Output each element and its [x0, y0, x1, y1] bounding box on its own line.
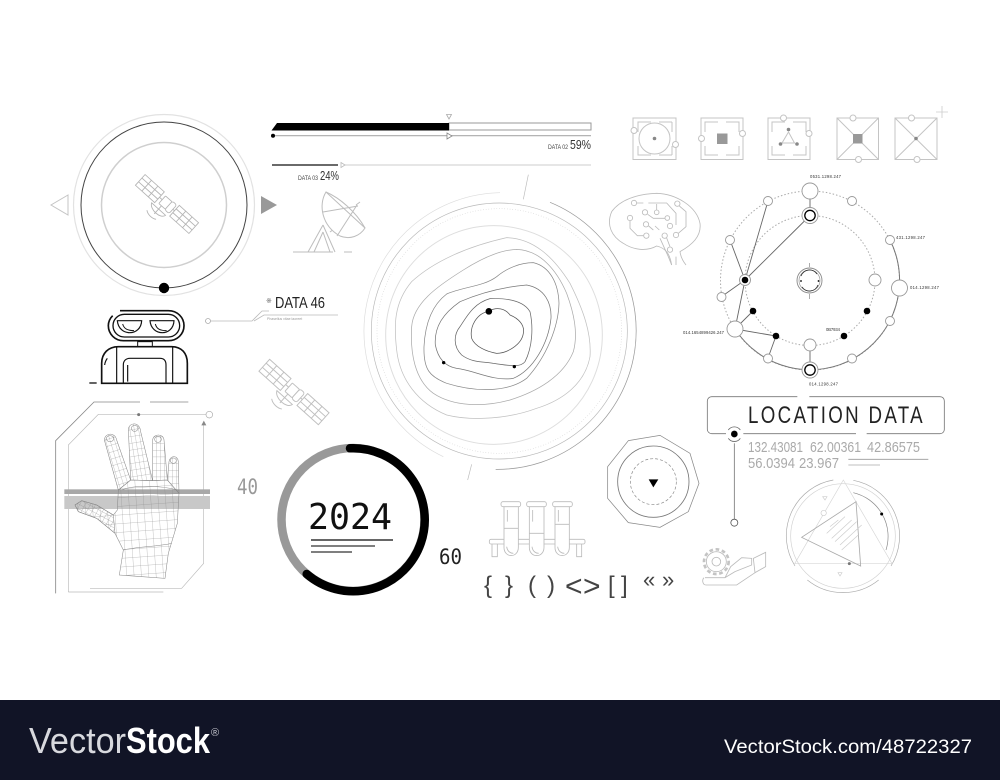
- footer logo: ®: [211, 727, 219, 739]
- coordinates text: 56.0394: [748, 455, 795, 472]
- icon: triangle emblem: [786, 480, 900, 593]
- icon: satellite outline: [249, 359, 329, 435]
- bracket glyphs row: }: [505, 572, 513, 599]
- coordinates text: 23.967: [799, 455, 839, 472]
- coordinates text: [748, 439, 920, 472]
- donut chart: 2024: [282, 448, 425, 591]
- bracket glyphs row: (: [528, 572, 536, 599]
- footer bar: [0, 700, 1000, 780]
- chart: contour map: [364, 175, 636, 480]
- icon square 5: [895, 115, 937, 162]
- label: 40: 40: [237, 475, 258, 499]
- icons: target squares row: [631, 106, 948, 162]
- chart: orbital network: 014.1298.247: [809, 382, 839, 386]
- center hub: [797, 263, 822, 299]
- data 46 label: DATA 46: [275, 295, 325, 312]
- progress bar: data 02: [271, 114, 591, 152]
- progress bar: data 02: DATA 02: [548, 145, 569, 151]
- hand wireframe: [75, 424, 179, 578]
- bracket glyphs row: {: [484, 572, 492, 599]
- coordinates text: 62.00361: [810, 439, 861, 456]
- bracket glyphs row: »: [662, 567, 674, 592]
- progress bar: data 02: 59%: [570, 138, 591, 152]
- chart: orbital network: 0B7934: [826, 327, 841, 332]
- footer url: VectorStock.com/48722327: [724, 737, 972, 758]
- label: 60: 60: [439, 545, 462, 569]
- footer logo: Vector: [29, 720, 126, 761]
- bracket glyphs row: [: [608, 572, 615, 599]
- chart: orbital network: 431.1298.247: [896, 235, 926, 240]
- bracket glyphs row: [484, 567, 674, 603]
- footer logo: [29, 720, 219, 761]
- icon square 1: [631, 118, 678, 160]
- icon: test tubes: [489, 502, 585, 557]
- icon square 3: [768, 115, 812, 160]
- chart: orbital network: 014.1654899426.247: [683, 330, 725, 335]
- chart: orbital network: [683, 174, 940, 386]
- panel: location data: [707, 397, 944, 526]
- icon: robot: [89, 311, 187, 383]
- icon: satellite: [127, 175, 199, 243]
- donut chart: 2024: 2024: [308, 497, 392, 538]
- progress bar: data 03: 24%: [320, 169, 339, 183]
- bracket glyphs row: <: [565, 570, 583, 603]
- icon: octagon target: [608, 435, 699, 527]
- icon square 2: [698, 118, 746, 160]
- progress bar: data 03: DATA 03: [298, 176, 319, 182]
- bracket glyphs row: >: [583, 570, 601, 603]
- icon: radar dish: [293, 192, 365, 252]
- coordinates text: 42.86575: [867, 439, 920, 456]
- icon: hand with gear: [703, 549, 766, 585]
- panel: satellite radar dial: [51, 114, 277, 296]
- chart: orbital network: 014.1298.247: [910, 285, 940, 290]
- data 46 label: Phasellus vitae laoreet: [267, 317, 302, 321]
- bracket glyphs row: ]: [621, 572, 628, 599]
- coordinates text: 132.43081: [748, 439, 803, 456]
- heading: location data: LOCATION DATA: [748, 402, 925, 429]
- bracket glyphs row: ): [547, 572, 555, 599]
- icon square 4: [837, 115, 878, 162]
- chart: orbital network: 0531.1298.247: [810, 174, 842, 179]
- data 46 label: ※: [266, 298, 272, 305]
- icon: brain circuit: [609, 193, 700, 265]
- bracket glyphs row: «: [643, 567, 655, 592]
- data 46 label: [206, 295, 338, 324]
- footer logo: Stock: [126, 720, 211, 761]
- panel: hand scanner: [56, 402, 213, 593]
- progress bar: data 03: [272, 162, 591, 183]
